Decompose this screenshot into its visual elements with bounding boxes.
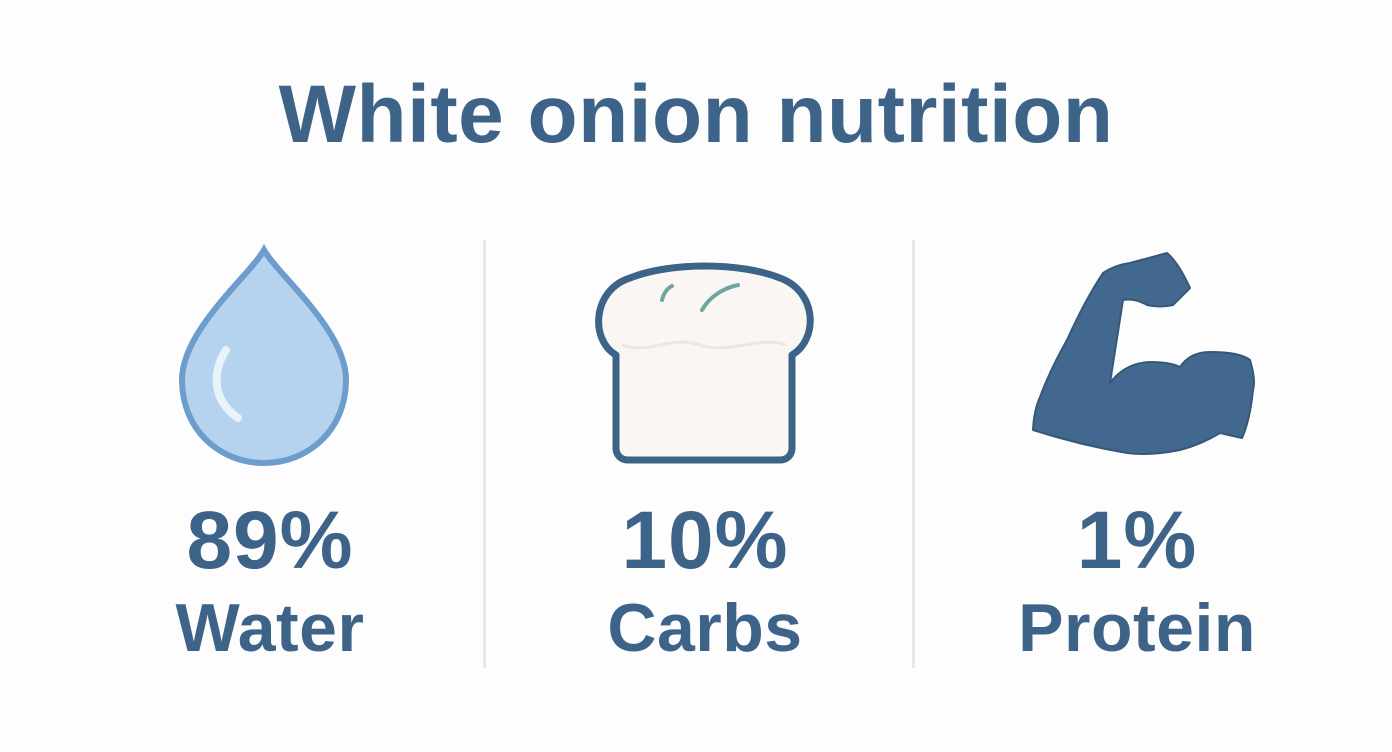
stat: protein — [1018, 495, 1256, 666]
stat: water — [176, 495, 364, 666]
stat: protein: Protein — [1018, 590, 1256, 666]
stat: water: 89% — [186, 495, 354, 586]
stat: protein: 1% — [1077, 495, 1197, 586]
title: White onion nutrition — [279, 69, 1113, 160]
stat: water: Water — [176, 590, 364, 666]
stat: carbs: Carbs — [607, 590, 803, 666]
stat: carbs — [607, 495, 803, 666]
stat: carbs: 10% — [621, 495, 789, 586]
